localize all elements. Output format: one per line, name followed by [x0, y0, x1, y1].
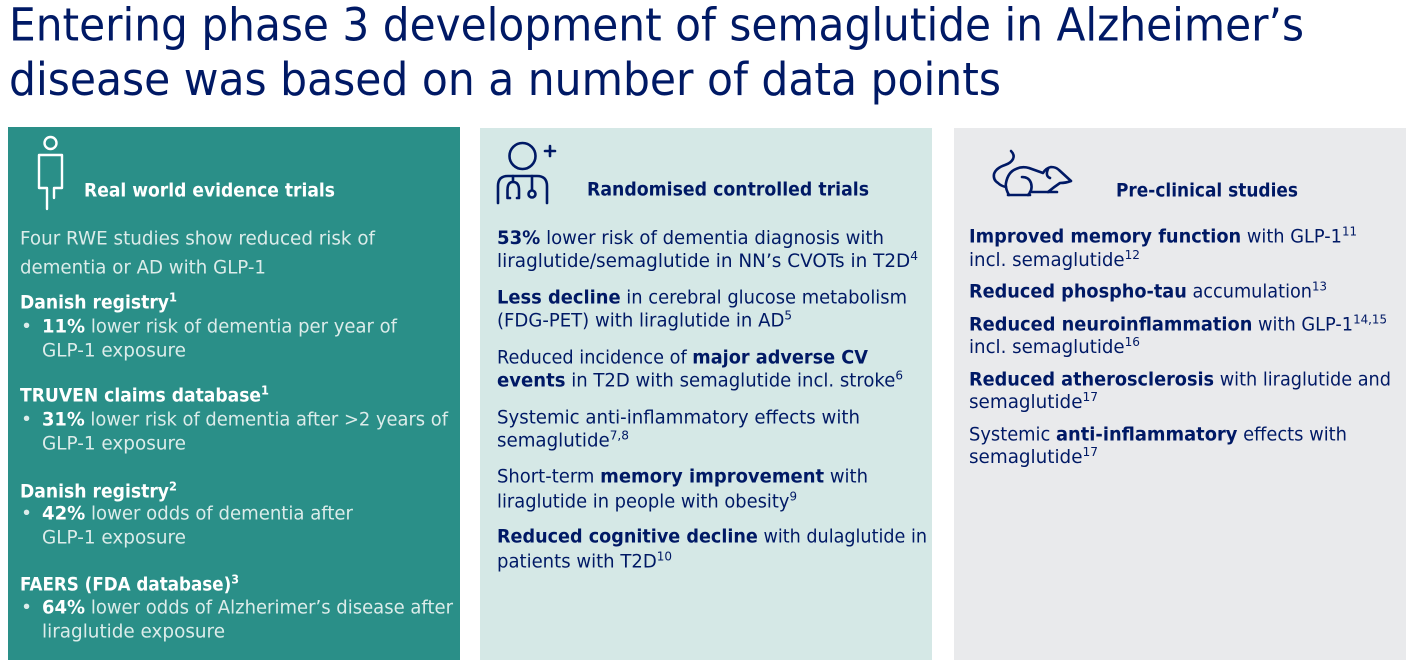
- text: atherosclerosis: semaglutide: [969, 392, 1085, 413]
- title: disease was based on a number of data points: [9, 53, 1001, 106]
- text: phospho-tau: 13: [1312, 278, 1327, 294]
- text: less decline: Less decline in cerebral glucose metabolism: [497, 288, 907, 308]
- text: cognitive decline: Reduced cognitive decline with dulaglutide in: [497, 526, 927, 548]
- text: systemic anti-inflammatory: semaglutide: [969, 447, 1085, 468]
- text: neuroinflammation: 14,15: [1353, 312, 1387, 326]
- text: memory function: [969, 224, 1357, 271]
- title: [9, 0, 1304, 106]
- text: major adverse CV events: 6: [895, 368, 903, 382]
- text: Danish registry 1: GLP-1 exposure: [42, 340, 186, 362]
- text: neuroinflammation: [969, 312, 1387, 358]
- text: memory improvement: liraglutide in people with obesity: [497, 492, 805, 512]
- text: FAERS: 3: [231, 572, 239, 586]
- text: systemic anti-inflammatory: Systemic anti-inflammatory effects with: [969, 424, 1347, 446]
- text: anti-inflammatory: semaglutide: [497, 430, 613, 452]
- text: Danish registry 2: •: [21, 504, 32, 524]
- text: 53% lower risk: 53% lower risk of dementia diagnosis with: [497, 228, 884, 249]
- text: memory improvement: [497, 466, 868, 512]
- text: atherosclerosis: 17: [1082, 389, 1098, 404]
- text: memory function: 11: [1342, 224, 1357, 238]
- heading: real world evidence trials: Real world evidence trials: [84, 180, 335, 202]
- text: TRUVEN claims database: [20, 382, 448, 454]
- text: intro: [20, 228, 375, 278]
- text: phospho-tau: Reduced phospho-tau accumulation: [969, 282, 1320, 302]
- text: TRUVEN claims database: 31% lower risk of dementia after >2 years of: [42, 410, 448, 430]
- icon: rat: [994, 151, 1071, 195]
- heading: randomised controlled trials: Randomised controlled trials: [587, 180, 869, 200]
- text: Danish registry 2: Danish registry: [20, 482, 183, 502]
- text: anti-inflammatory: 7,8: [610, 428, 629, 442]
- text: Danish registry 1: •: [21, 316, 32, 338]
- text: Danish registry 2: 2: [169, 478, 177, 494]
- text: FAERS: liraglutide exposure: [42, 622, 225, 642]
- text: FAERS: 64% lower odds of Alzherimer’s disease after: [42, 598, 453, 618]
- text: TRUVEN claims database: GLP-1 exposure: [42, 434, 186, 454]
- text: neuroinflammation: 16: [1125, 334, 1140, 349]
- text: 53% lower risk: [497, 228, 918, 272]
- panel: real world evidence trials: [8, 127, 460, 660]
- text: memory improvement: Short-term memory improvement with: [497, 466, 868, 488]
- text: FAERS: FAERS (FDA database): [20, 574, 257, 596]
- text: anti-inflammatory: Systemic anti-inflammatory effects with: [497, 408, 860, 428]
- text: systemic anti-inflammatory: [969, 424, 1347, 468]
- text: less decline: (FDG-PET) with liraglutide in AD: [497, 310, 796, 332]
- text: memory function: 12: [1125, 247, 1140, 262]
- text: neuroinflammation: Reduced neuroinflammation with GLP-1: [969, 314, 1359, 336]
- text: anti-inflammatory: [497, 408, 860, 452]
- panel: pre-clinical studies: [954, 128, 1406, 660]
- text: less decline: 5: [784, 308, 792, 322]
- icon: person: [39, 137, 62, 209]
- panel: randomised controlled trials: [480, 128, 932, 660]
- text: TRUVEN claims database: 1: [261, 382, 269, 398]
- text: 53% lower risk: liraglutide/semaglutide in NN’s CVOTs in T2D: [497, 251, 919, 272]
- text: Danish registry 2: 42% lower odds of dementia after: [42, 504, 353, 524]
- heading: pre-clinical studies: Pre-clinical studies: [1116, 180, 1298, 202]
- text: FAERS: [20, 572, 453, 642]
- text: Danish registry 2: [20, 478, 353, 548]
- text: major adverse CV events: events in T2D with semaglutide incl. stroke: [497, 370, 909, 392]
- text: TRUVEN claims database: TRUVEN claims database: [20, 386, 284, 406]
- text: FAERS: •: [21, 598, 32, 618]
- icon: doctor: [498, 143, 555, 203]
- text: TRUVEN claims database: •: [21, 410, 32, 430]
- text: memory function: Improved memory function with GLP-1: [969, 226, 1348, 248]
- text: atherosclerosis: Reduced atherosclerosis with liraglutide and: [969, 370, 1391, 390]
- text: cognitive decline: 10: [657, 548, 672, 564]
- text: intro: dementia or AD with GLP-1: [20, 258, 266, 278]
- text: atherosclerosis: [969, 370, 1391, 413]
- text: Danish registry 2: GLP-1 exposure: [42, 528, 186, 548]
- text: less decline: [497, 288, 907, 332]
- text: Danish registry 1: Danish registry: [20, 292, 183, 314]
- text: 53% lower risk: 4: [910, 248, 918, 263]
- text: Danish registry 1: [20, 290, 397, 362]
- text: memory function: incl. semaglutide: [969, 250, 1130, 271]
- text: intro: Four RWE studies show reduced risk of: [20, 228, 375, 250]
- title: Entering phase 3 development of semaglutide in Alzheimer’s: [9, 0, 1304, 52]
- text: major adverse CV events: Reduced incidence of major adverse CV: [497, 348, 868, 368]
- text: Danish registry 1: 1: [169, 290, 177, 304]
- text: memory improvement: 9: [789, 488, 797, 504]
- text: Danish registry 1: 11% lower risk of dementia per year of: [42, 316, 397, 338]
- text: cognitive decline: [497, 526, 927, 572]
- text: major adverse CV events: [497, 348, 903, 392]
- text: neuroinflammation: incl. semaglutide: [969, 337, 1130, 358]
- text: systemic anti-inflammatory: 17: [1082, 444, 1098, 459]
- text: cognitive decline: patients with T2D: [497, 552, 663, 572]
